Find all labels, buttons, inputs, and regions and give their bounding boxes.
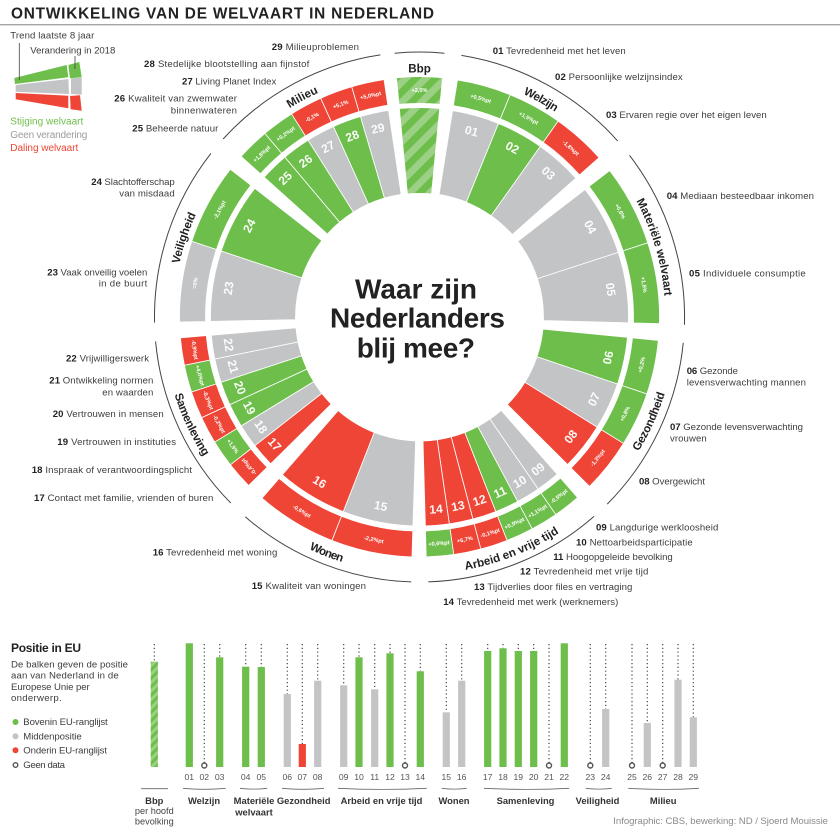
- Materiële welvaart cells: [512, 171, 673, 348]
- Samenleving cells: [179, 318, 332, 486]
- Samenleving numbers and values: 21: [225, 358, 242, 375]
- Welzijn numbers and values: 02: [503, 138, 522, 157]
- bars: Milieu: 29: [689, 772, 698, 782]
- Veiligheid numbers and values: -2,1%pt: [213, 200, 228, 220]
- Materiële welvaart numbers and values: 04: [581, 218, 600, 236]
- label 29: 29 Milieuproblemen: [272, 42, 359, 53]
- label 09: 09 Langdurige werkloosheid: [596, 522, 718, 533]
- label 05: 05 Individuele consumptie: [689, 269, 806, 280]
- legend: rising: Stijging welvaart: [10, 116, 84, 127]
- title: ONTWIKKELING VAN DE WELVAART IN NEDERLAND: [11, 6, 434, 22]
- label 14: 14 Tevredenheid met werk (werknemers): [443, 597, 618, 608]
- bars: Milieu: 28: [673, 772, 683, 782]
- Welzijn cells: [439, 80, 603, 246]
- Samenleving numbers and values: -0,3%pt: [201, 390, 214, 411]
- bars: Arbeid en vrije tijd: [338, 644, 427, 806]
- bars: Arbeid en vrije tijd: 11: [370, 772, 379, 782]
- panel: Veiligheid: [154, 153, 322, 322]
- label 04: 04 Mediaan besteedbaar inkomen: [667, 191, 814, 202]
- Arbeid en vrije tijd numbers and values: 11: [491, 483, 509, 501]
- Wonen numbers and values: -2,2%pt: [363, 535, 384, 545]
- Arbeid en vrije tijd numbers and values: 13: [450, 498, 466, 514]
- panel: Arbeid en vrije tijd: [423, 411, 594, 582]
- label 16: 16 Tevredenheid met woning: [153, 547, 277, 558]
- bars: Bbp: Bbp: [145, 795, 164, 806]
- bars: Welzijn: [183, 643, 226, 806]
- panel: Welzijn: [440, 54, 618, 234]
- panel: Milieu: [222, 54, 401, 234]
- bars: Gezondheid: [277, 644, 331, 806]
- Samenleving numbers and values: -0,2%pt: [211, 414, 226, 435]
- Arbeid en vrije tijd numbers and values: 09: [528, 459, 548, 479]
- bars: Materiële welvaart: [234, 644, 274, 817]
- EU legend: Middenpositie: [23, 732, 82, 743]
- Welzijn numbers and values: 03: [539, 164, 558, 183]
- Milieu numbers and values: +0,2%pt: [276, 126, 297, 143]
- Bbp heading: Bbp: [408, 62, 431, 76]
- Samenleving numbers and values: 17: [265, 435, 284, 454]
- bars: Gezondheid: 06: [283, 772, 292, 782]
- Arbeid en vrije tijd numbers and values: -0,5%pt: [550, 488, 569, 505]
- Samenleving numbers and values: 18: [251, 417, 271, 437]
- Veiligheid numbers and values: 24: [240, 216, 259, 235]
- Arbeid en vrije tijd numbers and values: 14: [429, 502, 444, 517]
- bars: Arbeid en vrije tijd: 14: [416, 772, 425, 782]
- bars: Wonen: 15: [442, 772, 451, 782]
- EU heading: Positie in EU: [11, 641, 81, 655]
- label 15: 15 Kwaliteit van woningen: [252, 581, 366, 592]
- Veiligheid heading: Veiligheid: [172, 212, 196, 262]
- bars: Bbp: per hoofd: [135, 806, 174, 816]
- label 26: binnenwateren: [171, 105, 237, 116]
- Gezondheid numbers and values: +0,2%: [638, 357, 647, 373]
- legend: no change: Geen verandering: [10, 130, 87, 141]
- Milieu numbers and values: +1,8%pt: [253, 145, 272, 164]
- label 07: [670, 422, 803, 445]
- EU description: Europese Unie per: [11, 682, 90, 693]
- bars: Welzijn: Welzijn: [188, 795, 220, 806]
- Samenleving numbers and values: 22: [221, 337, 236, 353]
- Arbeid en vrije tijd cells: [413, 410, 578, 558]
- label 08: 08 Overgewicht: [639, 477, 705, 488]
- Materiële welvaart arc: [582, 155, 732, 325]
- Gezondheid arc: [607, 337, 683, 510]
- bars: Arbeid en vrije tijd: Arbeid en vrije tijd: [341, 795, 423, 806]
- bars: Gezondheid: 07: [298, 772, 307, 782]
- bars: Materiële welvaart: Materiële: [234, 795, 274, 806]
- Milieu numbers and values: [253, 91, 386, 188]
- Milieu numbers and values: -0,1%: [305, 112, 320, 124]
- bars: Samenleving: [483, 643, 569, 806]
- bars: Samenleving: 22: [560, 772, 569, 782]
- bars: Welzijn: 01: [185, 772, 194, 782]
- Welzijn numbers and values: [463, 94, 580, 183]
- label 02: 02 Persoonlijke welzijnsindex: [555, 72, 683, 83]
- Welzijn numbers and values: +0,5%pt: [469, 94, 492, 105]
- Samenleving numbers and values: 20: [231, 379, 249, 397]
- centre question: Nederlanders: [330, 302, 505, 334]
- Wonen numbers and values: -0,6%pt: [291, 504, 312, 520]
- Veiligheid numbers and values: =0%: [192, 277, 200, 289]
- bars: Wonen: [438, 644, 470, 806]
- bars: Bbp: bevolking: [135, 817, 174, 827]
- Arbeid en vrije tijd numbers and values: [428, 459, 569, 548]
- Veiligheid cells: [178, 165, 331, 322]
- Samenleving arc: [113, 341, 273, 503]
- bars: Arbeid en vrije tijd: 09: [339, 772, 349, 782]
- bars: Materiële welvaart: welvaart: [234, 806, 273, 817]
- bars: Veiligheid: [576, 644, 620, 806]
- bars: Arbeid en vrije tijd: 13: [400, 772, 410, 782]
- EU legend: Geen data: [23, 760, 66, 771]
- centre question: blij mee?: [357, 333, 475, 364]
- label 23: in de buurt: [99, 279, 148, 290]
- Milieu numbers and values: 27: [319, 138, 338, 156]
- Bbp value: +2,0%: [411, 88, 428, 94]
- Arbeid en vrije tijd numbers and values: 10: [510, 472, 529, 491]
- bars: Samenleving: 19: [514, 772, 523, 782]
- EU description: onderwerp.: [11, 693, 62, 704]
- panel: Wonen: [245, 411, 416, 582]
- panel: Bbp: [395, 52, 444, 194]
- bars: Veiligheid: Veiligheid: [576, 795, 620, 806]
- bars: Milieu: Milieu: [650, 795, 677, 806]
- panel: Gezondheid: [508, 330, 684, 504]
- centre question: Waar zijn: [355, 273, 477, 304]
- label 23: [47, 267, 148, 290]
- Arbeid en vrije tijd numbers and values: +6,7%: [457, 536, 473, 545]
- EU legend: Bovenin EU-ranglijst: [23, 717, 108, 728]
- Wonen cells: [257, 400, 416, 557]
- Milieu numbers and values: +5,1%: [332, 100, 349, 111]
- bars: Milieu: 25: [627, 772, 637, 782]
- legend caption: change in 2018: Verandering in 2018: [30, 46, 115, 57]
- label 21: 21 Ontwikkeling normen: [49, 375, 153, 386]
- Samenleving numbers and values: -0,4%pt: [241, 457, 259, 476]
- legend sample wedge: [14, 43, 82, 111]
- bars: Arbeid en vrije tijd: 10: [354, 772, 364, 782]
- Arbeid en vrije tijd numbers and values: +1,1%pt: [527, 504, 549, 520]
- panel: Materiële welvaart: [518, 155, 686, 325]
- Wonen numbers and values: 15: [373, 498, 389, 514]
- Samenleving numbers and values: +1,9%: [225, 438, 239, 455]
- EU description: [11, 659, 128, 704]
- Milieu numbers and values: 25: [276, 168, 295, 188]
- bars: Samenleving: 17: [483, 772, 493, 782]
- bars: Samenleving: 18: [498, 772, 508, 782]
- Milieu numbers and values: 28: [344, 127, 361, 145]
- label 11: 11 Hoogopgeleide bevolking: [553, 552, 673, 563]
- Gezondheid numbers and values: 08: [561, 427, 581, 446]
- Bbp outer band: [397, 77, 442, 104]
- bars: Milieu: [627, 644, 699, 806]
- bars: Samenleving: Samenleving: [497, 795, 555, 806]
- Gezondheid numbers and values: -1,3%pt: [590, 449, 607, 468]
- bars: Milieu: 27: [658, 772, 668, 782]
- bars: Welzijn: 03: [215, 772, 225, 782]
- label 18: 18 Inspraak of verantwoordingsplicht: [32, 465, 192, 476]
- label 23: 23 Vaak onveilig voelen: [47, 267, 147, 278]
- Gezondheid cells: [497, 329, 658, 490]
- bars: Milieu: 26: [643, 772, 652, 782]
- label 26: 26 Kwaliteit van zwemwater: [114, 94, 238, 105]
- label 03: 03 Ervaren regie over het eigen leven: [606, 110, 767, 121]
- label 28: 28 Stedelijke blootstelling aan fijnstof: [144, 59, 310, 70]
- bars: Wonen: Wonen: [438, 795, 470, 806]
- bars: Materiële welvaart: 04: [241, 772, 251, 782]
- label 01: 01 Tevredenheid met het leven: [493, 46, 626, 57]
- Materiële welvaart numbers and values: +0,6%: [613, 203, 626, 220]
- Milieu heading: Milieu: [286, 88, 318, 108]
- label 10: 10 Nettoarbeidsparticipatie: [576, 537, 693, 548]
- label 21: [49, 375, 153, 398]
- Arbeid en vrije tijd numbers and values: -0,1%pt: [480, 528, 501, 540]
- EU description: De balken geven de positie: [11, 659, 128, 670]
- bars: Samenleving: 21: [544, 772, 554, 782]
- Bbp arc: [395, 52, 444, 53]
- label 06: [687, 366, 806, 389]
- Materiële welvaart heading: Materiële welvaart: [636, 198, 672, 296]
- Arbeid en vrije tijd arc: [428, 471, 594, 627]
- Samenleving numbers and values: -0,9%pt: [189, 340, 198, 360]
- label 19: 19 Vertrouwen in instituties: [57, 437, 176, 448]
- bars: Arbeid en vrije tijd: 12: [385, 772, 395, 782]
- Wonen heading: Wonen: [311, 542, 343, 562]
- Wonen numbers and values: 16: [310, 473, 329, 492]
- Welzijn numbers and values: +1,5%pt: [517, 111, 539, 127]
- bars: Gezondheid: Gezondheid: [277, 795, 331, 806]
- legend caption: trend: Trend laatste 8 jaar: [10, 31, 95, 42]
- bars: Veiligheid: 24: [601, 772, 611, 782]
- Veiligheid numbers and values: [192, 200, 259, 296]
- Arbeid en vrije tijd numbers and values: +0,6%pt: [428, 540, 450, 548]
- Welzijn arc: [452, 55, 627, 141]
- label 24: [91, 177, 175, 200]
- Milieu numbers and values: 29: [370, 120, 386, 137]
- label 21: en waarden: [102, 387, 153, 398]
- source credit: Infographic: CBS, bewerking: ND / Sjoerd Mouissie: [613, 816, 828, 827]
- bars: Samenleving: 20: [529, 772, 539, 782]
- EU legend: Onderin EU-ranglijst: [23, 746, 107, 757]
- legend: falling: Daling welvaart: [10, 143, 79, 154]
- Samenleving numbers and values: 19: [240, 399, 259, 417]
- Welzijn numbers and values: -1,8%pt: [561, 140, 580, 158]
- label 26: [114, 94, 238, 116]
- Wonen numbers and values: [291, 473, 389, 545]
- Veiligheid numbers and values: 23: [221, 280, 237, 296]
- Materiële welvaart numbers and values: [581, 203, 647, 297]
- Materiële welvaart numbers and values: 05: [603, 282, 618, 297]
- label 22: 22 Vrijwilligerswerk: [66, 353, 149, 364]
- panel: Samenleving: [155, 328, 331, 504]
- Wonen arc: [243, 517, 413, 582]
- Arbeid en vrije tijd numbers and values: 12: [471, 492, 488, 509]
- bar chart: position in EU: [135, 643, 699, 827]
- Welzijn heading: Welzijn: [525, 86, 558, 112]
- label 06: 06 Gezonde: [687, 366, 738, 377]
- Samenleving numbers and values: [189, 337, 284, 476]
- label 24: van misdaad: [119, 189, 175, 200]
- EU description: aan van Nederland in de: [11, 670, 119, 681]
- Gezondheid numbers and values: 06: [600, 349, 616, 366]
- Milieu cells: [241, 77, 412, 235]
- Samenleving numbers and values: +4,0%pt: [194, 365, 205, 387]
- label 20: 20 Vertrouwen in mensen: [53, 409, 164, 420]
- Gezondheid numbers and values: [561, 349, 647, 468]
- Milieu numbers and values: 26: [296, 151, 315, 171]
- label 24: 24 Slachtofferschap: [91, 177, 175, 188]
- indicator labels: [32, 42, 814, 608]
- Gezondheid numbers and values: 07: [585, 390, 603, 408]
- bars: Bbp: [135, 644, 174, 827]
- radial chart: [154, 52, 686, 582]
- bars: Materiële welvaart: 05: [257, 772, 266, 782]
- Milieu numbers and values: +5,0%pt: [360, 91, 382, 102]
- Arbeid en vrije tijd heading: Arbeid en vrije tijd: [466, 526, 558, 570]
- EU legend: [12, 717, 108, 771]
- label 07: vrouwen: [670, 434, 707, 445]
- Samenleving heading: Samenleving: [175, 393, 208, 456]
- label 07: 07 Gezonde levensverwachting: [670, 422, 803, 433]
- bars: Welzijn: 02: [200, 772, 209, 782]
- Gezondheid numbers and values: +0,8%: [620, 406, 632, 423]
- legend: reading guide: [10, 31, 115, 154]
- Milieu arc: [223, 15, 380, 179]
- Arbeid en vrije tijd numbers and values: +0,9%pt: [504, 517, 526, 531]
- bars: Wonen: 16: [457, 772, 467, 782]
- label 17: 17 Contact met familie, vrienden of buren: [34, 493, 213, 504]
- label 06: levensverwachting mannen: [687, 378, 806, 389]
- label 13: 13 Tijdverlies door files en vertraging: [474, 582, 632, 593]
- bars: Veiligheid: 23: [586, 772, 595, 782]
- label 25: 25 Beheerde natuur: [132, 124, 219, 135]
- Veiligheid arc: [151, 153, 214, 323]
- label 27: 27 Living Planet Index: [182, 76, 277, 87]
- bars: Gezondheid: 08: [313, 772, 323, 782]
- Bbp wedge: [400, 108, 439, 194]
- Gezondheid heading: Gezondheid: [633, 392, 665, 450]
- panel: Positie in EU text: [11, 641, 128, 771]
- centre question: [330, 273, 505, 364]
- label 12: 12 Tevredenheid met vrije tijd: [520, 567, 648, 578]
- Materiële welvaart numbers and values: +1,6%: [639, 276, 647, 293]
- Welzijn numbers and values: 01: [463, 123, 480, 140]
